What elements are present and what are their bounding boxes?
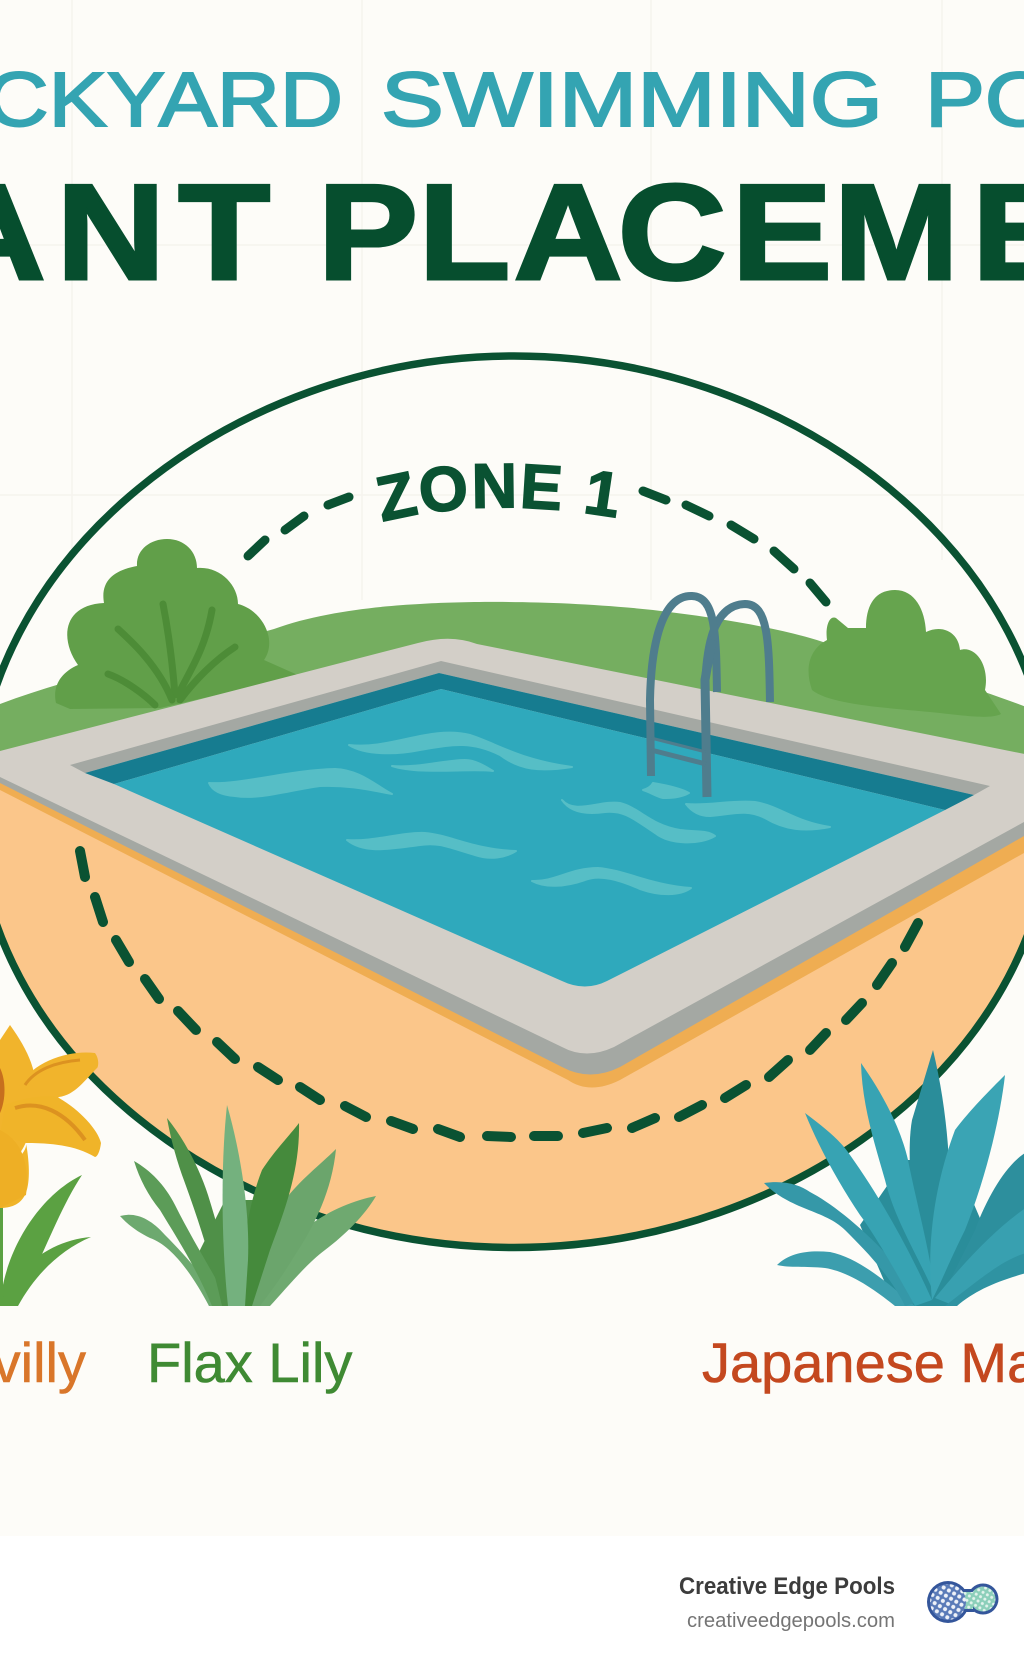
footer brand [679,1573,998,1632]
ladder back rail [705,604,770,797]
oval zone ring [0,356,1024,1248]
dashed zone arc: top [248,491,826,602]
dashed zone arc: bottom [80,851,918,1137]
icon: brand logo [927,1581,998,1623]
pool coping [0,639,1024,1088]
zone 1 label [376,463,617,522]
label: flax lily: Flax Lily [147,1331,352,1394]
title: backyard swimming pool [0,57,1024,143]
lawn [0,602,1024,754]
pool water [85,673,974,986]
title: backyard swimming pool: SWIMMING [381,57,883,143]
plant: flax lily [120,1105,376,1306]
water ripples [209,733,830,894]
pool zone diagram [0,352,1024,1252]
title: plant placement [0,157,1024,308]
brand url: creativeedgepools.com [687,1610,895,1632]
zone 1 label: ZONE 1 [376,463,617,522]
plant: yellow lily [0,1025,101,1306]
peach planting zone [0,790,1024,1244]
bush left [55,539,300,709]
brand name: Creative Edge Pools [679,1573,895,1600]
bush right [809,590,1001,717]
plant: blue agave [764,1050,1024,1306]
ladder [650,596,717,797]
